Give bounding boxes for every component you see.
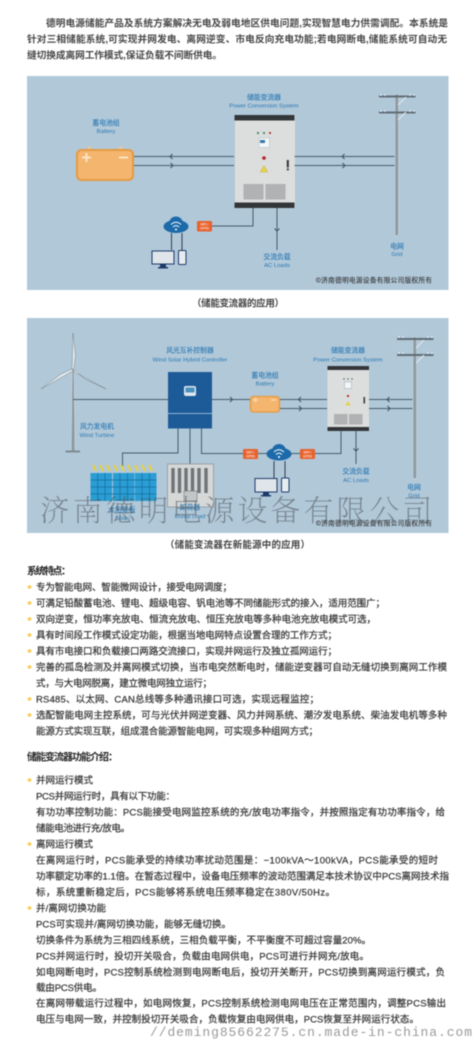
- list: off-grid mode: 功率额定功率的1.1倍。在暂态过程中，设备电压频率的波动范围满足本技术协议中PCS离网技术指: [36, 870, 449, 882]
- label: hybrid controller: 风光互补控制器: [166, 346, 214, 354]
- label: wind turbine: Wind Turbine: [80, 433, 115, 439]
- list: grid and off-grid switching: 在离网带载运行过程中，如电网恢复，PCS控制系统检测电网电压在正常范围内，调整PCS输出: [36, 998, 446, 1010]
- label: AC loads: 交流负载: [342, 466, 370, 476]
- heading: PCS functions: 储能变流器功能介绍：: [27, 750, 118, 764]
- label: wind turbine: 风力发电机: [80, 422, 114, 430]
- label: PCS: Power Conversion System: [313, 358, 383, 364]
- list: grid-connected mode: 有功功率控制功能：PCS能接受电网监控系统的充/放电功率指令，并按照指定有功功率指令，给: [36, 806, 445, 818]
- label: battery: [251, 370, 279, 388]
- list: system features: 具有时间段工作模式设定功能，根据当地电网特点设置合理的工作方式；: [36, 630, 337, 642]
- list: grid and off-grid switching: [28, 902, 446, 1026]
- icon: utility pole: [379, 94, 416, 236]
- list: grid and off-grid switching: 并/离网切换功能: [36, 902, 106, 914]
- label: PCS: 储能变流器: [247, 92, 281, 102]
- list: system features: 能源方式实现互联，组成混合能源智能电网，可实现多种组网方式；: [36, 726, 318, 738]
- list: off-grid mode: [28, 838, 449, 898]
- list: system features: 式，与大电网脱离，建立微电网独立运行；: [36, 678, 212, 690]
- label: PCS: [313, 346, 383, 364]
- icon: battery: [77, 146, 133, 180]
- list: off-grid mode: 离网运行模式: [36, 838, 93, 850]
- label: battery: 蓄电池组: [92, 118, 120, 127]
- list: system features: RS485、以太网、CAN总线等多种通讯接口可选，实现远程监控；: [36, 694, 319, 706]
- list: grid and off-grid switching: 切换条件为系统为三相四线系统，三相负载平衡，不平衡度不可超过容量20%。: [36, 934, 371, 946]
- list: off-grid mode: 标，系统重新稳定后，PCS能够将系统电压频率稳定在380V/50Hz。: [36, 886, 335, 898]
- label: AC loads: [263, 252, 291, 269]
- arrows: PCS to grid: [294, 154, 394, 168]
- icon: battery: [250, 396, 280, 412]
- intro paragraph: 针对三相储能系统,可实现并网发电、离网逆变、市电反向充电功能;若电网断电,储能系统可自动无: [27, 32, 447, 46]
- label: grid: 电网: [390, 242, 404, 250]
- badge: WiFi GPRS right: [300, 449, 315, 459]
- list: grid-connected mode: 储能电池进行充/放电。: [36, 822, 130, 834]
- arrows: cloud to devices: [274, 461, 285, 478]
- badge: WiFi GPRS: GPRS: [200, 226, 209, 230]
- icon: PCS cabinet: [328, 366, 369, 431]
- label: dump load: 卸荷器: [180, 502, 200, 512]
- label: dump load: Dump Load: [175, 514, 205, 520]
- badge: WiFi GPRS right: WiFi /: [303, 450, 312, 454]
- connections: controller to solar, dump load and communications: [122, 428, 341, 468]
- icon: wind turbine: [41, 333, 106, 452]
- arrows: battery links: [212, 397, 327, 411]
- label: grid: 电网: [407, 482, 421, 492]
- list: grid-connected mode: 并网运行模式: [36, 774, 93, 786]
- intro paragraph: [27, 16, 448, 62]
- list: system features: 专为智能电网、智能微网设计，接受电网调度；: [36, 582, 232, 594]
- label: grid: Grid: [391, 252, 403, 258]
- list: system features: [28, 582, 447, 738]
- panel: PCS application diagram: [27, 76, 448, 290]
- list: grid and off-grid switching: 载由PCS供电。: [36, 982, 102, 994]
- connection: PCS to communications: [212, 208, 253, 226]
- list: off-grid mode: 在离网运行时，PCS能承受的持续功率扰动范围是：−100kVA～100kVA，PCS能承受的短时: [36, 854, 438, 866]
- icon: cloud wifi: [266, 444, 292, 460]
- heading: system features: 系统特点：: [27, 564, 71, 578]
- label: AC loads: [342, 466, 370, 484]
- icon: dump load: [168, 464, 214, 507]
- list: system features: 选配智能电网主控系统，可与光伏并网逆变器、风力并网系统、潮汐发电系统、柴油发电机等多种: [36, 710, 447, 722]
- icon: monitor and phone: [152, 250, 186, 268]
- intro paragraph: 缝切换成离网工作模式,保证负载不间断供电。: [27, 48, 222, 62]
- arrows: PCS to grid: [369, 397, 412, 411]
- label: PCS: Power Conversion System: [229, 104, 299, 110]
- label: solar panels: [108, 505, 136, 522]
- list: grid-connected mode: [28, 774, 445, 834]
- caption: PCS in new energy: （储能变流器在新能源中的应用）: [165, 539, 310, 551]
- list: grid-connected mode: PCS并网运行时，具有以下功能：: [36, 790, 175, 802]
- list: system features: 双向逆变，恒功率充放电、恒流充放电、恒压充放电等多种电池充放电模式可选，: [36, 614, 376, 626]
- connection: AC loads: [274, 208, 280, 250]
- label: battery: 蓄电池组: [251, 370, 279, 380]
- icon: hybrid controller: [168, 372, 212, 428]
- label: hybrid controller: [153, 346, 227, 364]
- list: system features: 具有市电接口和负载接口两路交流接口，实现并网运行及独立孤网运行；: [36, 646, 337, 658]
- label: grid: Grid: [408, 494, 420, 500]
- list: system features: 完善的孤岛检测及并离网模式切换，当市电突然断电时，储能逆变器可自动无缝切换到离网工作模: [36, 662, 447, 674]
- label: AC loads: 交流负载: [263, 252, 291, 261]
- list: grid and off-grid switching: PCS并网运行时，投切开关吸合，负载由电网供电，PCS可进行并网充/放电。: [36, 950, 369, 962]
- badge: WiFi GPRS: [197, 221, 212, 232]
- list: system features: 可满足铅酸蓄电池、锂电、超级电容、钒电池等不同储能形式的接入，适用范围广；: [36, 598, 385, 610]
- connection: turbine to controller: [73, 398, 168, 400]
- watermark: company name: 济南德明电源设备有限公司: [40, 488, 432, 530]
- label: grid: [407, 482, 421, 500]
- label: PCS: 储能变流器: [331, 346, 365, 354]
- label: wind turbine: [80, 422, 115, 439]
- icon: utility pole: [397, 336, 434, 478]
- watermark: website: //deming85662275.cn.made-in-china.com: [150, 1025, 472, 1040]
- connection: AC loads: [354, 430, 358, 464]
- arrows: battery to PCS: [134, 154, 234, 168]
- label: AC loads: AC Loads: [264, 263, 290, 269]
- badge: WiFi GPRS right: GPRS: [303, 454, 312, 458]
- caption: PCS application: （储能变流器的应用）: [192, 298, 284, 310]
- list: grid and off-grid switching: PCS可实现并/离网切换功能，能够无缝切换。: [36, 918, 231, 930]
- label: PCS: [229, 92, 299, 110]
- list: grid and off-grid switching: 电压与电网一致，并控制投切开关吸合，负载恢复由电网供电，PCS恢复至并网运行状态。: [36, 1014, 419, 1026]
- label: solar panels: 太阳能板: [108, 505, 136, 514]
- icon: PCS cabinet: [234, 115, 295, 208]
- label: battery: Battery: [97, 129, 115, 135]
- label: battery: Battery: [256, 382, 274, 388]
- copyright note: ©济南德明电源设备有限公司版权所有: [316, 276, 432, 284]
- label: grid: [390, 242, 404, 258]
- icon: cloud wifi: [164, 216, 188, 233]
- label: battery: [92, 118, 120, 135]
- label: hybrid controller: Wind Solar Hybrid Controller: [153, 358, 227, 364]
- panel: PCS in new energy diagram: [27, 318, 448, 533]
- badge: WiFi GPRS: WiFi /: [200, 222, 209, 226]
- list: grid and off-grid switching: 如电网断电时，PCS控制系统检测到电网断电后，投切开关断开，PCS切换到离网运行模式，负: [36, 966, 445, 978]
- icon: solar array: [90, 465, 156, 501]
- copyright note: ©济南德明电源设备有限公司版权所有: [316, 518, 432, 528]
- badge: WiFi GPRS left: WiFi /: [246, 450, 255, 454]
- label: dump load: [175, 502, 205, 520]
- icon: monitor and phone: [255, 478, 289, 496]
- intro paragraph: 德明电源储能产品及系统方案解决无电及弱电地区供电问题,实现智慧电力供需调配。本系统是: [46, 16, 448, 30]
- badge: WiFi GPRS left: GPRS: [246, 454, 255, 458]
- arrows: cloud to devices: [172, 233, 182, 250]
- label: solar panels: Solar: [115, 516, 129, 522]
- label: AC loads: AC Loads: [343, 478, 369, 484]
- badge: WiFi GPRS left: [243, 449, 258, 459]
